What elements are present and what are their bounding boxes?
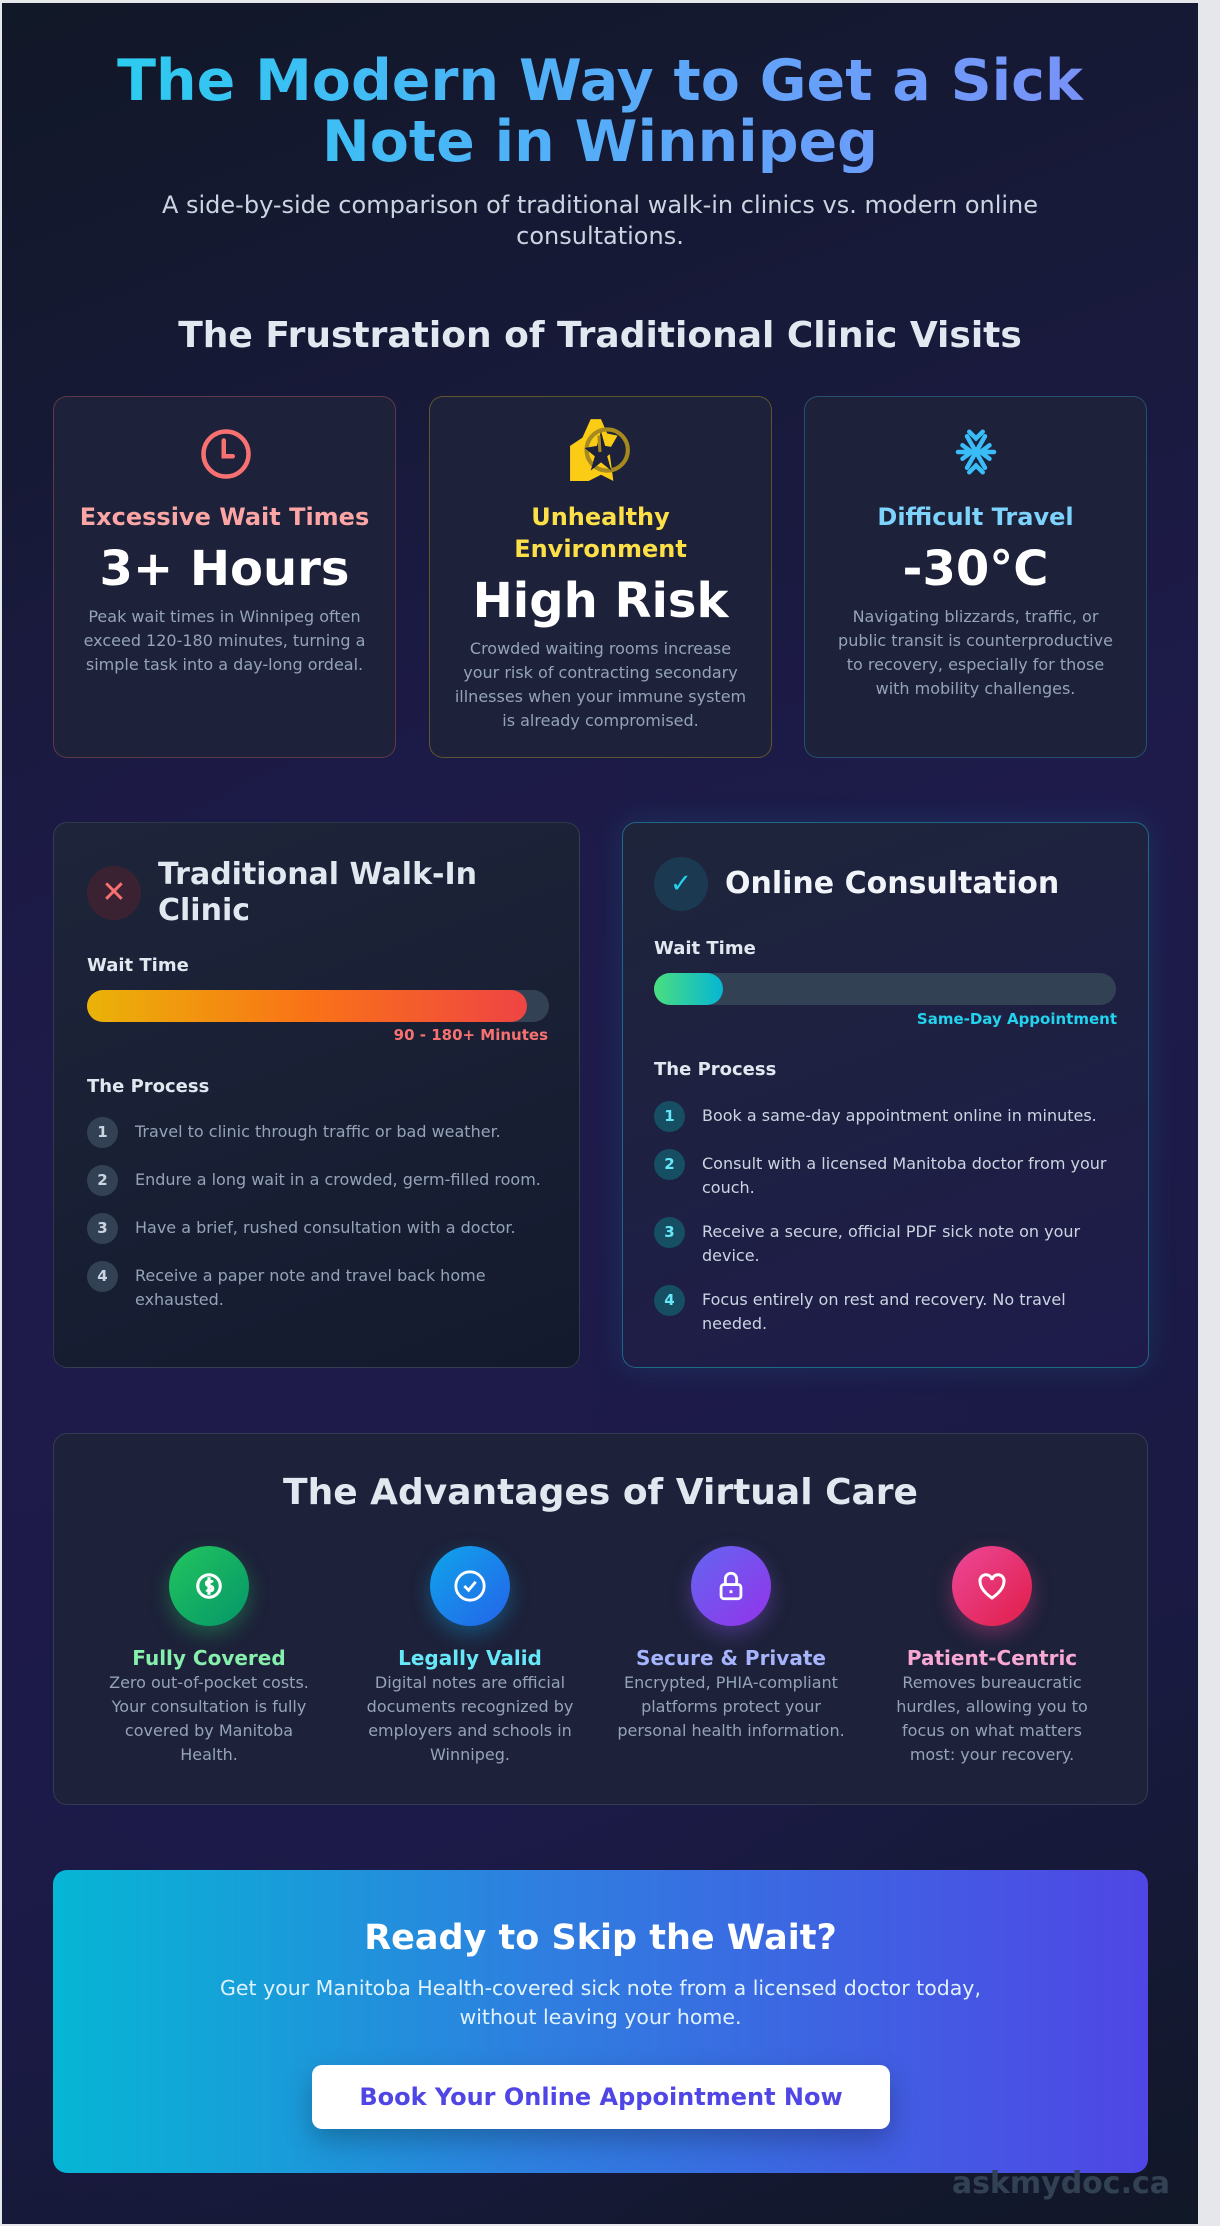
cta button — [312, 2065, 890, 2129]
description: Peak wait times in Winnipeg often exceed 120-180 minutes, turning a simple task into a day-long ordeal. — [84, 607, 365, 674]
title: Note in Winnipeg — [322, 109, 878, 175]
icon: virus star — [570, 419, 630, 481]
panel: unhealthy environment — [429, 396, 772, 758]
process steps: 2 — [664, 1155, 675, 1173]
card title — [514, 503, 687, 563]
cta heading: Ready to Skip the Wait? — [364, 1918, 837, 1958]
big stat: High Risk — [473, 573, 728, 629]
icon: x circle — [87, 866, 141, 920]
bar value: Same-Day Appointment — [917, 1010, 1117, 1028]
watermark: askmydoc.ca — [952, 2166, 1170, 2201]
big stat: 3+ Hours — [100, 541, 349, 597]
advantage: legally valid: Digital notes are official documents recognized by employers and schools in Winnipeg. — [367, 1673, 573, 1764]
heading: Online Consultation — [725, 866, 1059, 901]
card title: Unhealthy — [531, 503, 670, 531]
icon: heart — [952, 1546, 1032, 1626]
icon: dollar — [169, 1546, 249, 1626]
panel: call to action — [53, 1870, 1148, 2173]
wait time label: Wait Time — [87, 955, 189, 976]
bar: wait time — [654, 973, 1116, 1005]
process steps: Endure a long wait in a crowded, germ-filled room. — [135, 1170, 541, 1189]
advantage: patient-centric: Removes bureaucratic hurdles, allowing you to focus on what matters most: your recovery. — [896, 1673, 1088, 1764]
process steps: Receive a paper note and travel back home exhausted. — [135, 1266, 486, 1309]
process steps: Travel to clinic through traffic or bad weather. — [135, 1122, 501, 1141]
panel: excessive wait times — [53, 396, 396, 758]
advantage: secure & private: Secure & Private — [636, 1646, 826, 1670]
process steps — [87, 1117, 541, 1309]
bar value: 90 - 180+ Minutes — [394, 1026, 548, 1044]
panel: traditional walk-in clinic — [53, 822, 580, 1368]
card title: Excessive Wait Times — [80, 503, 369, 531]
heading: Clinic — [158, 893, 250, 928]
description: Navigating blizzards, traffic, or public transit is counterproductive to recovery, especially for those with mobility challenges. — [838, 607, 1113, 698]
advantage: fully covered: Zero out-of-pocket costs. Your consultation is fully covered by Manitoba Health. — [109, 1673, 309, 1764]
process steps: 3 — [664, 1223, 675, 1241]
section heading: frustration: The Frustration of Traditional Clinic Visits — [178, 315, 1022, 356]
bar: wait time — [87, 990, 549, 1022]
panel: difficult travel — [804, 396, 1147, 758]
advantage: patient-centric — [896, 1544, 1088, 1764]
process steps: Book a same-day appointment online in minutes. — [702, 1106, 1097, 1125]
process label: The Process — [87, 1076, 209, 1097]
process steps: 4 — [97, 1267, 108, 1285]
wait time label: Wait Time — [654, 938, 756, 959]
process steps: 1 — [664, 1107, 675, 1125]
advantage: fully covered — [109, 1545, 309, 1764]
advantage: secure & private — [617, 1544, 845, 1740]
process steps — [654, 1101, 1106, 1333]
icon: check circle: ✓ — [670, 869, 692, 899]
advantage: legally valid: Legally Valid — [398, 1646, 542, 1670]
cta button: Book Your Online Appointment Now — [359, 2083, 843, 2111]
heading: The Advantages of Virtual Care — [283, 1472, 918, 1513]
icon: x circle: ✕ — [101, 875, 127, 910]
process steps: 1 — [97, 1123, 108, 1141]
process label: The Process — [654, 1059, 776, 1080]
icon: clock — [201, 429, 251, 479]
title — [2, 51, 1198, 173]
card title: Difficult Travel — [877, 503, 1074, 531]
cta text: Get your Manitoba Health-covered sick note from a licensed doctor today, without leaving your home. — [220, 1976, 981, 2029]
big stat: -30°C — [903, 541, 1048, 597]
advantage: secure & private: Encrypted, PHIA-compliant platforms protect your personal health information. — [617, 1673, 845, 1740]
process steps: Have a brief, rushed consultation with a doctor. — [135, 1218, 516, 1237]
process steps: 2 — [97, 1171, 108, 1189]
process steps: Focus entirely on rest and recovery. No travel needed. — [702, 1290, 1066, 1333]
advantage: patient-centric: Patient-Centric — [907, 1646, 1077, 1670]
heading: Traditional Walk-In — [158, 857, 477, 892]
process steps: 4 — [664, 1291, 675, 1309]
advantage: fully covered: Fully Covered — [132, 1646, 286, 1670]
subtitle: A side-by-side comparison of traditional walk-in clinics vs. modern online consultations. — [162, 191, 1038, 250]
icon: lock — [691, 1546, 771, 1626]
panel: advantages of virtual care — [53, 1433, 1148, 1805]
icon: check — [430, 1546, 510, 1626]
process steps: Receive a secure, official PDF sick note on your device. — [702, 1222, 1080, 1265]
advantage: legally valid — [367, 1544, 573, 1764]
title: The Modern Way to Get a Sick — [117, 48, 1083, 114]
heading — [158, 857, 477, 928]
description: Crowded waiting rooms increase your risk of contracting secondary illnesses when your immune system is already compromised. — [455, 639, 746, 730]
icon: check circle — [654, 857, 708, 911]
icon: snowflake — [956, 430, 996, 474]
process steps: 3 — [97, 1219, 108, 1237]
process steps: Consult with a licensed Manitoba doctor from your couch. — [702, 1154, 1106, 1197]
card title: Environment — [514, 535, 687, 563]
panel: online consultation — [622, 822, 1149, 1368]
